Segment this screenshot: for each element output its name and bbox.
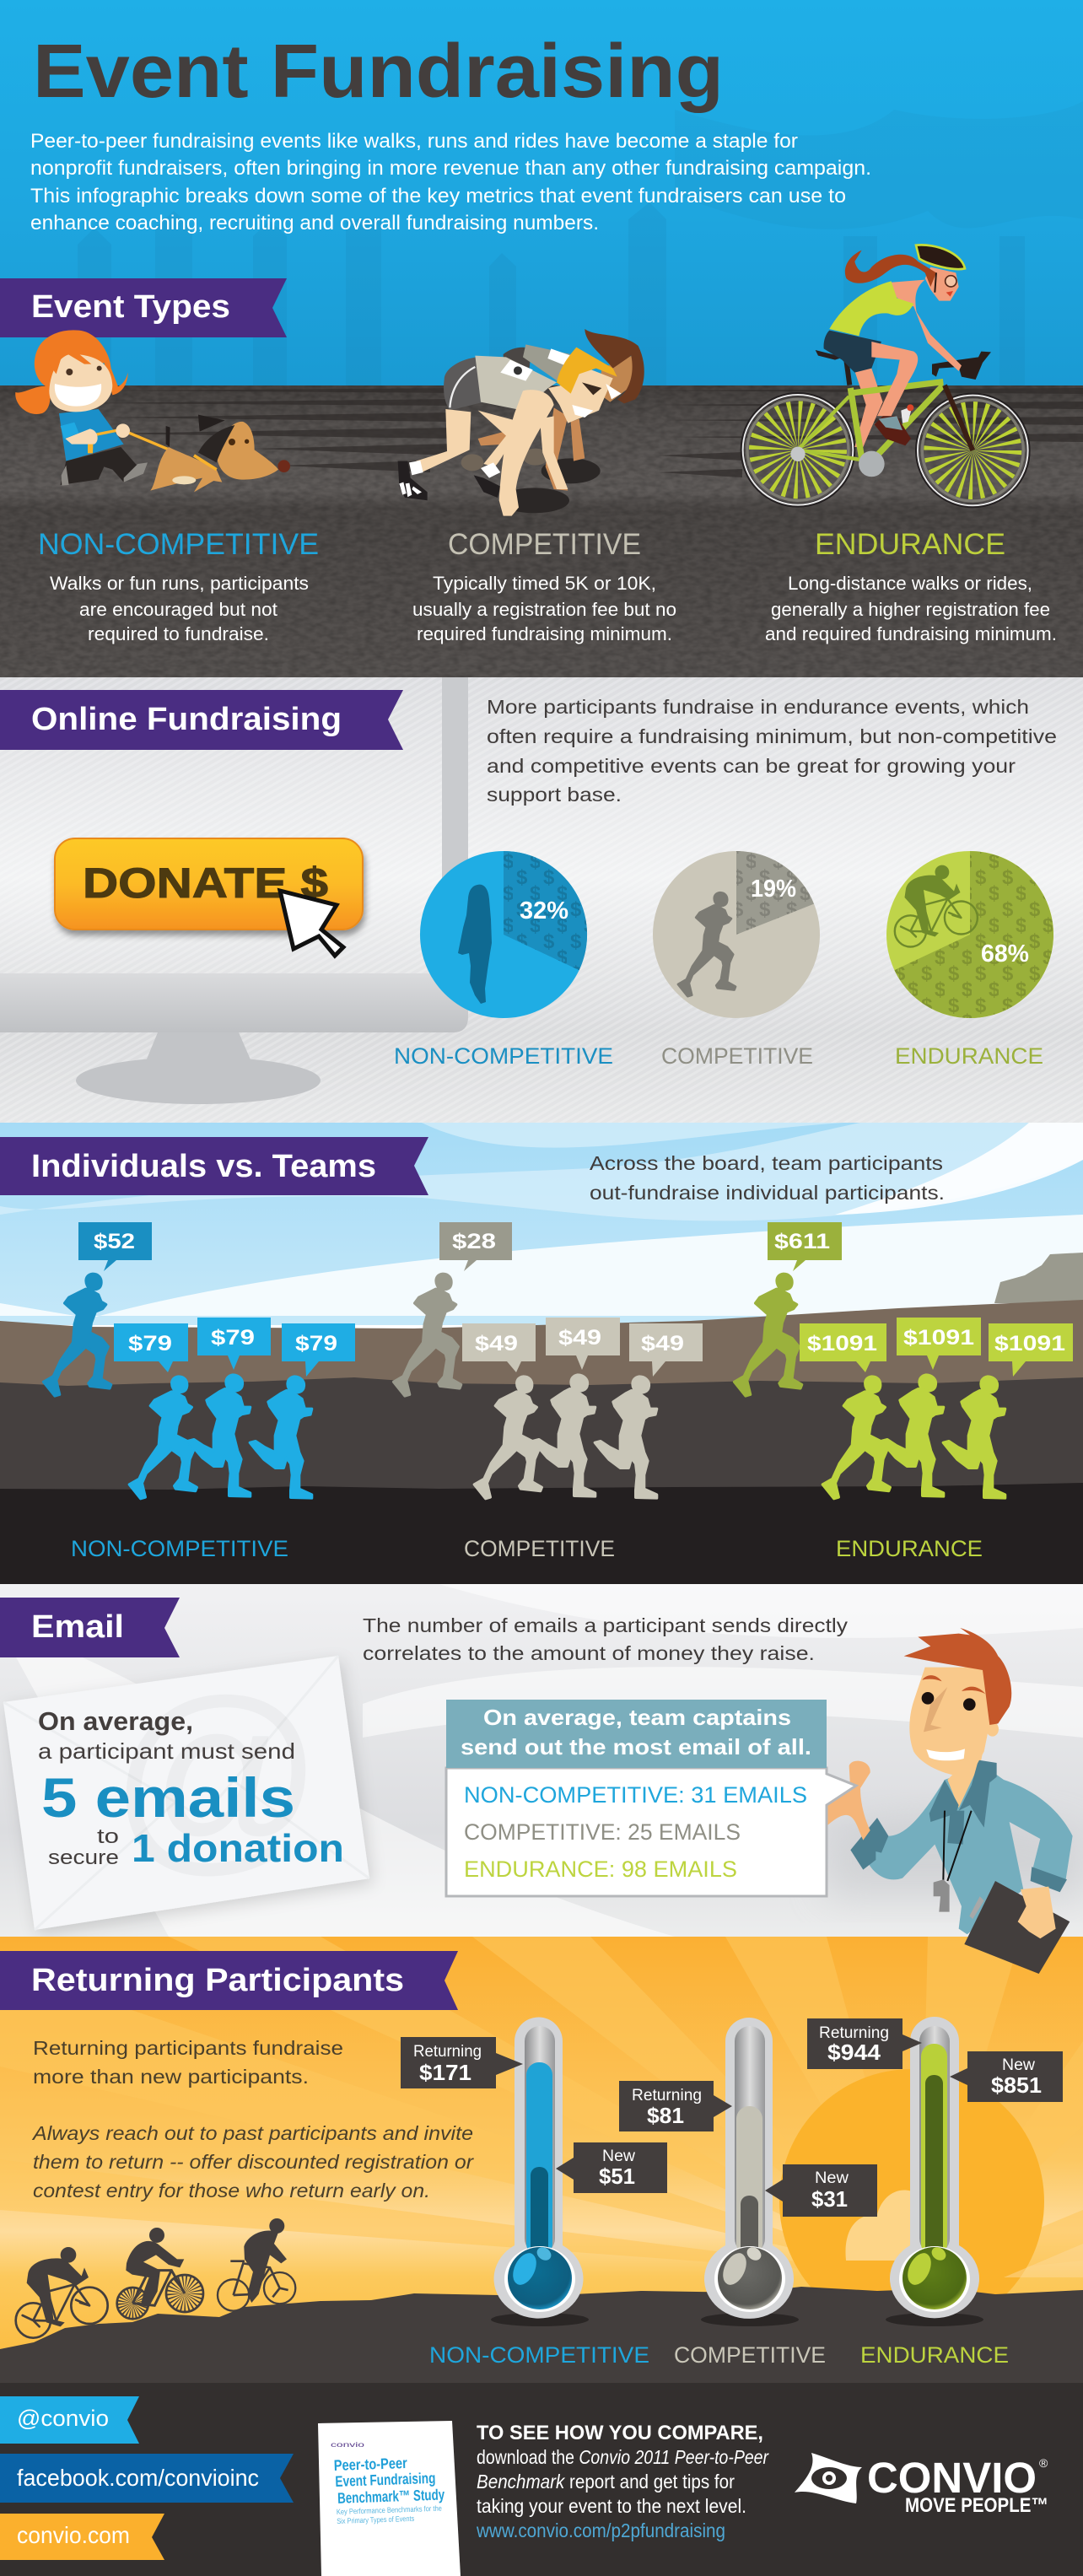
pie: non-competitive 32%: 32%: [520, 897, 568, 924]
text: email intro: [363, 1614, 849, 1664]
tag: new $851: New: [1002, 2056, 1035, 2074]
tag: returning $944: Returning: [819, 2024, 889, 2042]
tag: returning $81: $81: [647, 2103, 684, 2128]
benchmark study booklet: convio: [331, 2441, 365, 2449]
tag: new $851: $851: [991, 2072, 1042, 2098]
ribbon: individuals vs teams: Individuals vs. Teams: [31, 1149, 376, 1184]
tags: non-competitive amounts: $79: [128, 1332, 172, 1355]
thermometer labels: NON-COMPETITIVE: [429, 2342, 649, 2368]
envelope with donation stat: a participant must send: [38, 1738, 295, 1764]
ribbon: online fundraising: [0, 690, 403, 750]
tag: returning $81: Returning: [632, 2087, 702, 2104]
tags: competitive amounts: $49: [558, 1326, 601, 1350]
column: endurance event type: generally a higher registration fee: [771, 599, 1050, 620]
column: endurance event type: and required fundraising minimum.: [765, 623, 1057, 644]
text: online fundraising intro: often require a fundraising minimum, but non-competitive: [487, 725, 1057, 747]
runner column labels: ENDURANCE: [836, 1536, 983, 1561]
pie: competitive 19%: [653, 851, 820, 1018]
text: call to action: [476, 2422, 769, 2541]
envelope with donation stat: 1 donation: [132, 1826, 344, 1870]
tags: non-competitive amounts: $52: [94, 1230, 135, 1253]
ribbon: twitter: [0, 2396, 139, 2444]
envelope with donation stat: @: [110, 1657, 324, 1892]
envelope with donation stat: to: [97, 1825, 119, 1848]
illustration: cyclist: [742, 245, 1028, 506]
column: competitive event type: required fundraising minimum.: [417, 623, 672, 644]
tags: non-competitive amounts: $79: [211, 1326, 255, 1350]
envelope with donation stat: [3, 1656, 369, 1930]
thermometer labels: COMPETITIVE: [674, 2342, 826, 2368]
tag: new $31: New: [815, 2169, 849, 2187]
thermometer labels: ENDURANCE: [860, 2342, 1009, 2368]
tags: non-competitive amounts: $79: [295, 1332, 337, 1355]
text: returning participants tip: contest entry for those who return early on.: [33, 2180, 430, 2201]
intro paragraph: This infographic breaks down some of the key metrics that event fundraisers can use to: [30, 185, 846, 207]
man with thumbs up and clipboard: [825, 1628, 1073, 1974]
section: header and event types background: [0, 0, 1083, 678]
benchmark study booklet: Key Performance Benchmarks for the: [337, 2504, 442, 2516]
runner column labels: NON-COMPETITIVE: [71, 1536, 288, 1561]
text: teams intro: Across the board, team participants: [590, 1152, 943, 1174]
runners: endurance: [735, 1274, 1005, 1499]
logo: convio: CONVIO: [867, 2454, 1037, 2502]
tag: new $51: $51: [599, 2164, 635, 2189]
ribbon: email: [0, 1598, 180, 1657]
pie labels: ENDURANCE: [895, 1043, 1043, 1069]
column: competitive event type: COMPETITIVE: [448, 528, 641, 561]
tag: new $31: $31: [811, 2186, 848, 2212]
section: individuals vs teams landscape: [0, 1123, 1083, 1584]
callout: team captains emails: NON-COMPETITIVE: 31 EMAILS: [464, 1782, 807, 1808]
ribbon: online fundraising: Online Fundraising: [31, 702, 342, 737]
intro paragraph: [30, 130, 871, 234]
section: online fundraising background: [0, 677, 1083, 1123]
thermometer: endurance: [886, 2017, 983, 2326]
ribbon: facebook: facebook.com/convioinc: [17, 2465, 259, 2491]
tag: returning $171: $171: [419, 2060, 471, 2085]
text: call to action: download the Convio 2011 Peer-to-Peer: [477, 2446, 769, 2468]
tag: new $31: [765, 2164, 877, 2217]
intro paragraph: enhance coaching, recruiting and overall fundraising numbers.: [30, 212, 599, 234]
envelope with donation stat: On average,: [38, 1706, 193, 1736]
ribbon: returning participants: [0, 1951, 458, 2010]
ribbon: event types: Event Types: [31, 289, 230, 325]
text: teams intro: [590, 1152, 945, 1204]
ribbon: website: [0, 2514, 164, 2560]
text: returning participants tip: Always reach out to past participants and invite: [31, 2122, 473, 2144]
column: competitive event type: Typically timed 5K or 10K,: [433, 573, 656, 594]
text: returning participants intro: more than new participants.: [33, 2066, 309, 2088]
text: email intro: The number of emails a participant sends directly: [363, 1614, 849, 1636]
column: endurance event type: [765, 528, 1057, 644]
column: endurance event type: ENDURANCE: [815, 528, 1005, 561]
illustration: two competitive runners: [398, 329, 644, 516]
tag: new $51: New: [602, 2148, 635, 2165]
tags: endurance amounts: $1091: [994, 1332, 1065, 1355]
logo: convio: ®: [1039, 2456, 1048, 2470]
column: endurance event type: Long-distance walks or rides,: [788, 573, 1032, 594]
tag: returning $171: Returning: [413, 2043, 482, 2061]
cyclists silhouette: [16, 2218, 295, 2338]
callout: team captains emails: send out the most email of all.: [461, 1734, 811, 1760]
logo: convio: [795, 2453, 1048, 2517]
column: non-competitive event type: [38, 528, 319, 644]
text: online fundraising intro: and competitive events can be great for growing your: [487, 755, 1016, 777]
text: online fundraising intro: [487, 696, 1057, 806]
section: email background: [0, 1584, 1083, 1937]
envelope with donation stat: secure: [48, 1846, 119, 1869]
text: teams intro: out-fundraise individual participants.: [590, 1182, 945, 1204]
logo: convio: MOVE PEOPLE™: [905, 2494, 1048, 2517]
ribbon: returning participants: Returning Participants: [31, 1963, 404, 1998]
tags: competitive amounts: $49: [475, 1332, 518, 1355]
intro paragraph: Peer-to-peer fundraising events like walks, runs and rides have become a staple for: [30, 130, 798, 153]
runners: non-competitive: [44, 1274, 312, 1499]
column: competitive event type: [412, 528, 676, 644]
tag: returning $944: $944: [827, 2040, 881, 2065]
tag: returning $81: [619, 2081, 732, 2131]
ribbon: facebook: [0, 2454, 294, 2503]
column: non-competitive event type: are encouraged but not: [79, 599, 277, 620]
benchmark study booklet: Benchmark™ Study: [337, 2486, 445, 2507]
ribbon: individuals vs teams: [0, 1137, 428, 1195]
column: non-competitive event type: NON-COMPETITIVE: [38, 528, 319, 561]
tags: endurance amounts: [768, 1222, 1073, 1377]
callout: team captains emails: ENDURANCE: 98 EMAILS: [464, 1857, 737, 1882]
thermometer: competitive: [701, 2018, 799, 2326]
ribbon: website: convio.com: [17, 2522, 130, 2548]
callout: team captains emails: COMPETITIVE: 25 EMAILS: [464, 1819, 741, 1845]
tag: new $51: [556, 2142, 667, 2193]
ribbon: event types: [0, 278, 287, 337]
pie labels: NON-COMPETITIVE: [394, 1043, 613, 1069]
tag: returning $171: [401, 2037, 523, 2088]
tags: competitive amounts: [439, 1222, 703, 1377]
benchmark study booklet: Six Primary Types of Events: [337, 2514, 415, 2525]
section: returning participants sunburst background: [0, 1937, 1083, 2384]
donate button: [55, 838, 363, 956]
text: call to action: TO SEE HOW YOU COMPARE,: [477, 2422, 763, 2444]
text: returning participants tip: [31, 2122, 474, 2201]
pie labels: COMPETITIVE: [661, 1043, 813, 1069]
column: non-competitive event type: required to fundraise.: [88, 623, 269, 644]
text: call to action: Benchmark report and get tips for: [477, 2471, 735, 2492]
footer background: [0, 2383, 1083, 2576]
text: call to action: taking your event to the next level.: [477, 2495, 746, 2517]
runner column labels: [71, 1536, 983, 1561]
callout: team captains emails: On average, team captains: [483, 1705, 791, 1730]
column: competitive event type: usually a registration fee but no: [412, 599, 676, 620]
pie: endurance 68%: [886, 851, 1053, 1018]
runners: competitive: [394, 1274, 657, 1499]
pie: competitive 19%: 19%: [751, 876, 796, 903]
donate button: DONATE $: [83, 860, 328, 907]
intro paragraph: nonprofit fundraisers, often bringing in more revenue than any other fundraising campaign.: [30, 157, 871, 180]
tags: competitive amounts: $28: [452, 1230, 496, 1253]
title: Event Fundraising: [33, 30, 724, 114]
tag: new $851: [950, 2051, 1063, 2102]
ribbon: twitter: @convio: [17, 2406, 109, 2431]
text: online fundraising intro: More participants fundraise in endurance events, which: [487, 696, 1029, 718]
thermometer: non-competitive: [491, 2017, 589, 2326]
runner column labels: COMPETITIVE: [464, 1536, 615, 1561]
tags: endurance amounts: $1091: [807, 1332, 877, 1355]
tags: endurance amounts: $611: [774, 1230, 830, 1253]
benchmark study booklet: Event Fundraising: [335, 2470, 436, 2490]
tags: non-competitive amounts: [78, 1222, 355, 1377]
text: call to action: www.convio.com/p2pfundraising: [476, 2519, 725, 2541]
pie: non-competitive 32%: [420, 851, 587, 1018]
envelope with donation stat: 5 emails: [41, 1766, 295, 1829]
ribbon: email: Email: [31, 1609, 124, 1645]
callout: team captains emails: [446, 1700, 856, 1896]
illustration: girl walking dog: [15, 330, 290, 492]
pie labels: [394, 1043, 1043, 1069]
column: non-competitive event type: Walks or fun runs, participants: [50, 573, 309, 594]
tags: competitive amounts: $49: [641, 1332, 684, 1355]
text: email intro: correlates to the amount of money they raise.: [363, 1642, 815, 1664]
tag: returning $944: [807, 2018, 922, 2069]
icon: computer monitor: [0, 677, 468, 1104]
pie: endurance 68%: 68%: [981, 940, 1029, 967]
icon: mouse cursor: [280, 891, 343, 956]
text: online fundraising intro: support base.: [487, 784, 622, 806]
benchmark study booklet: [318, 2421, 461, 2576]
text: returning participants tip: them to return -- offer discounted registration or: [33, 2151, 474, 2173]
text: returning participants intro: Returning participants fundraise: [33, 2037, 343, 2059]
tags: endurance amounts: $1091: [903, 1326, 974, 1350]
text: returning participants intro: [33, 2037, 343, 2088]
thermometer labels: [429, 2342, 1009, 2368]
ground silhouette: [0, 2287, 1083, 2384]
benchmark study booklet: Peer-to-Peer: [333, 2455, 407, 2474]
